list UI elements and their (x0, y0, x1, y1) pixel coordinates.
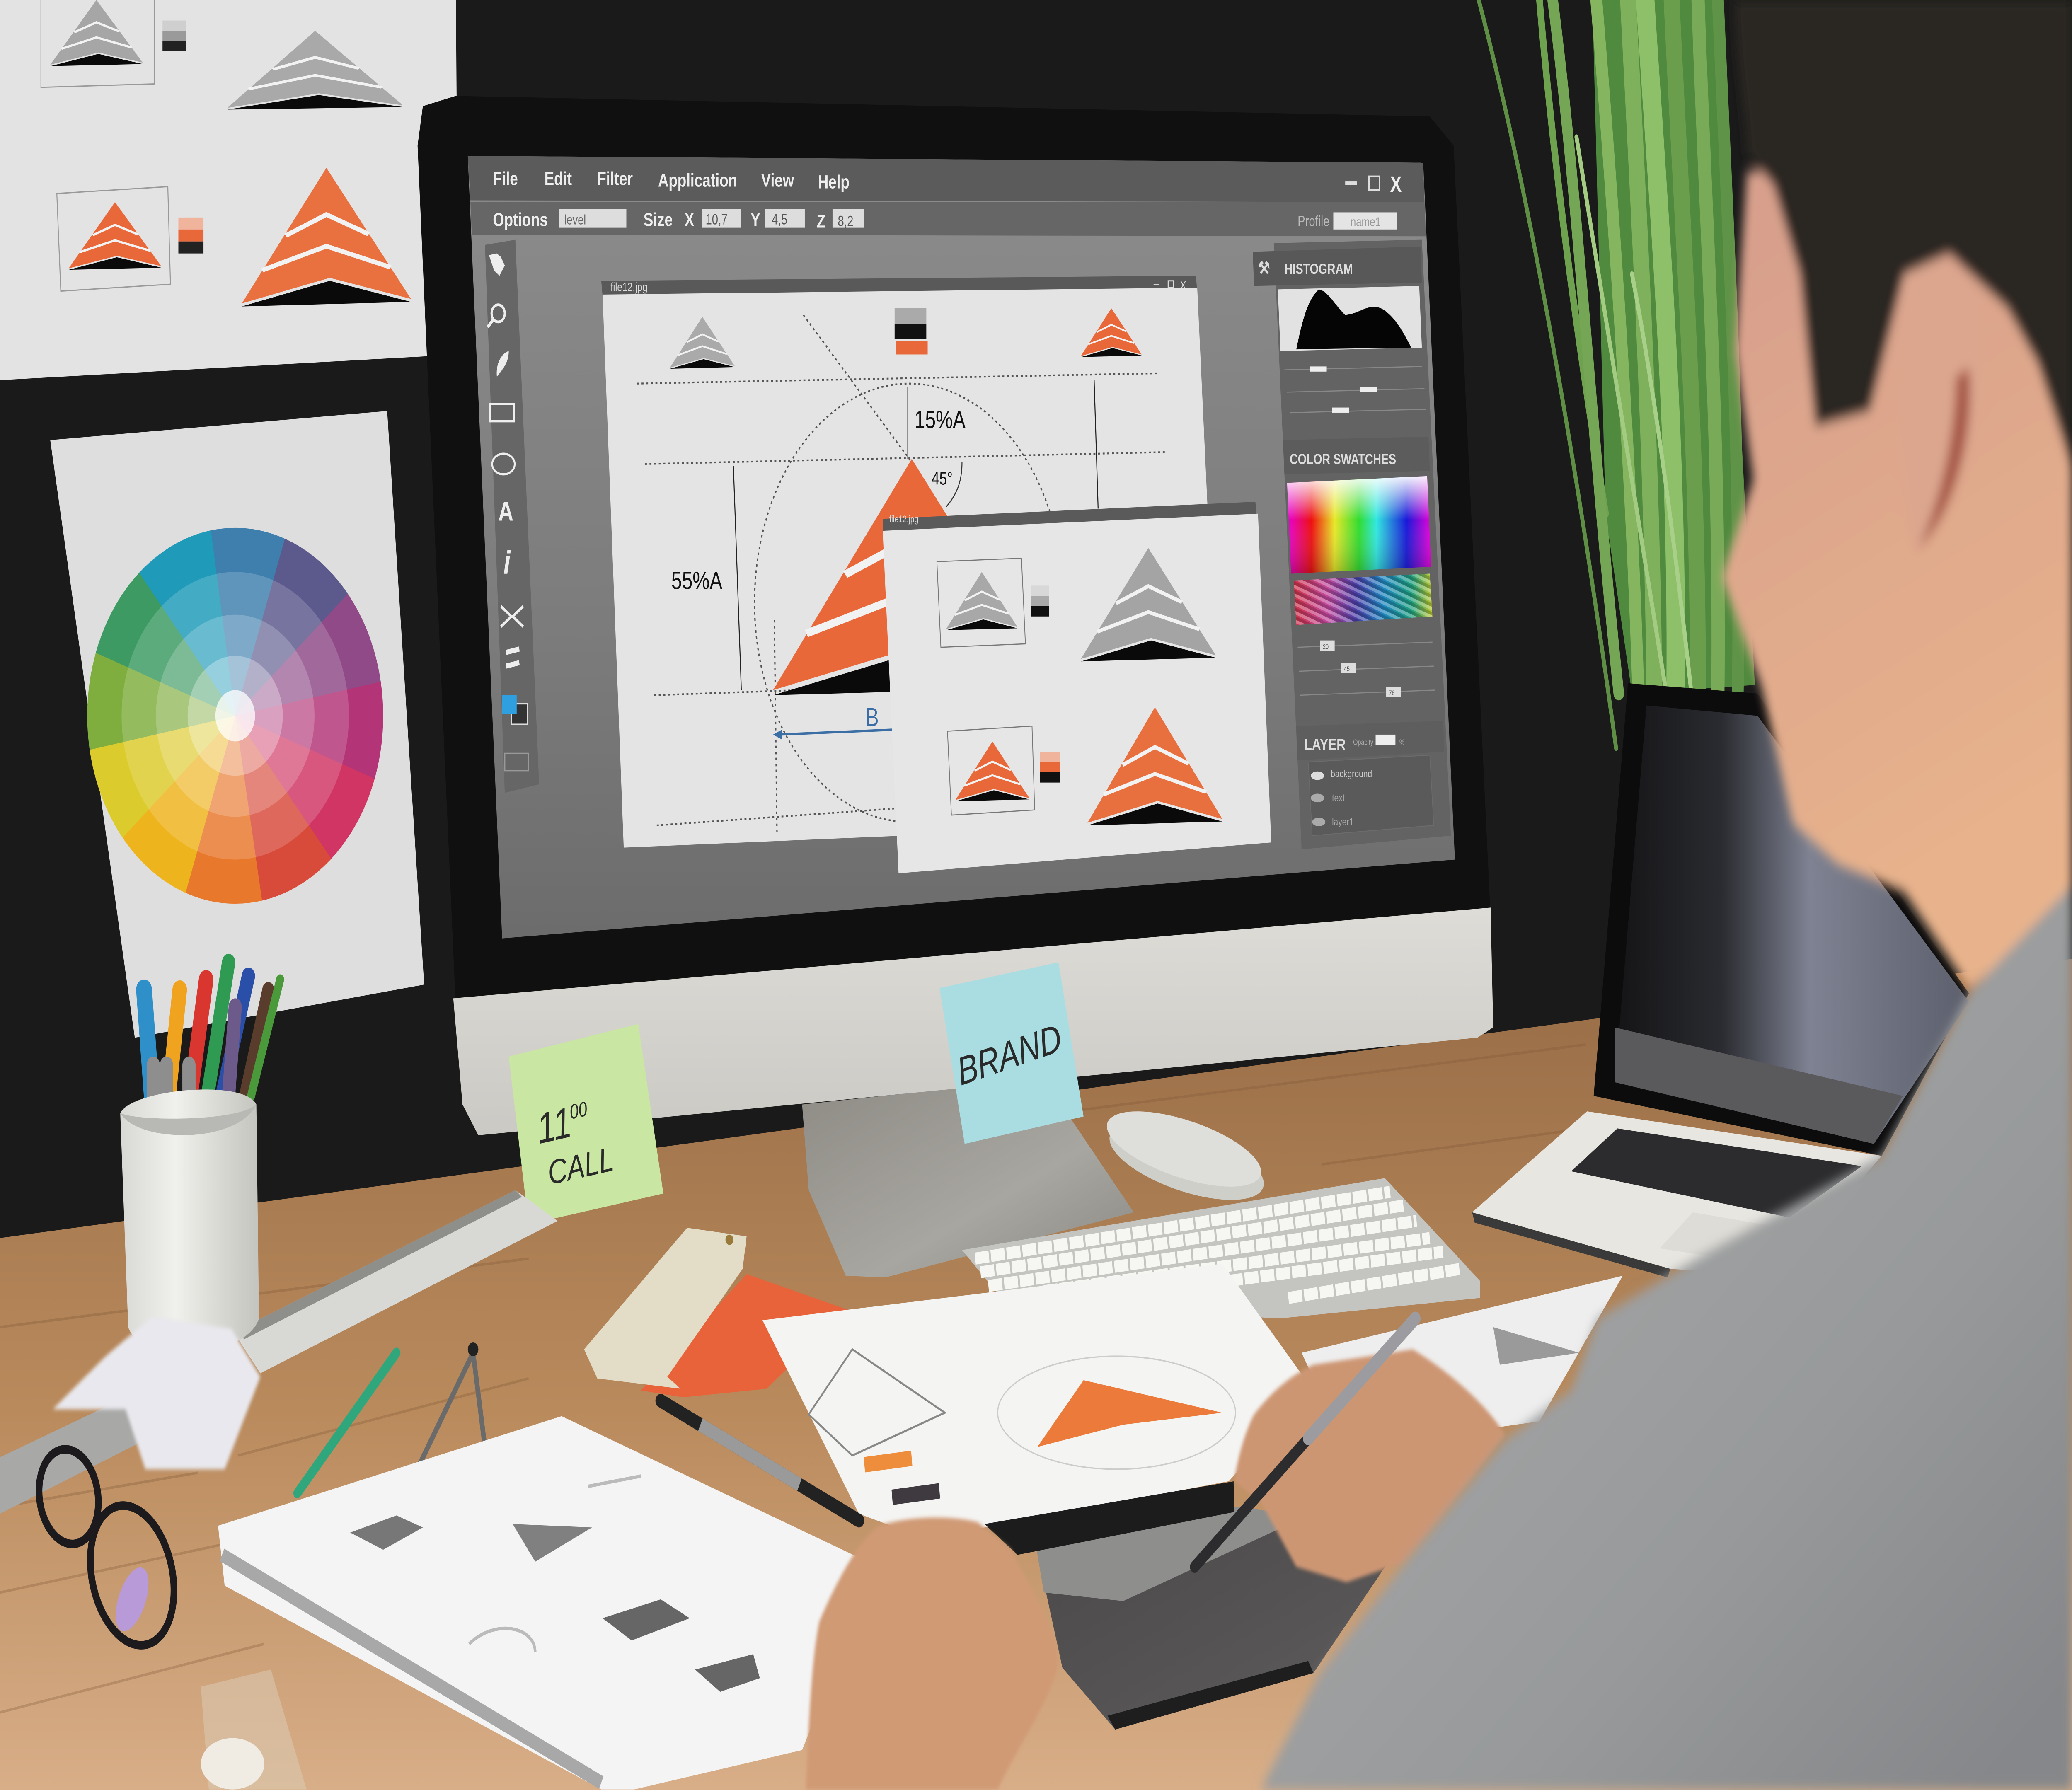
screen (468, 156, 1455, 939)
window: file12 main: 45° (932, 469, 953, 489)
sticky note: call: 00 (568, 1098, 589, 1124)
pens (144, 963, 280, 1116)
layer list: % (1399, 738, 1405, 747)
sticky note: call: CALL (545, 1139, 616, 1192)
graphics tablet (985, 1481, 1395, 1730)
monitor bezel (418, 96, 1491, 1010)
options bar: Y (750, 209, 760, 230)
layer list: text (1332, 792, 1345, 804)
options bar: 8,2 (838, 213, 853, 229)
transparent ruler (201, 1669, 307, 1790)
layer list: layer1 (1332, 816, 1353, 828)
window: file12 overlay (883, 502, 1271, 873)
marker pen (661, 1401, 859, 1521)
sticky note: call (509, 1024, 663, 1224)
right panel (1253, 240, 1451, 849)
window: file12 main: B (866, 703, 879, 732)
color swatches: 20 (1323, 643, 1329, 651)
man: right hand (1234, 1350, 1505, 1582)
menu bar: Application (658, 169, 737, 191)
tool palette: i (503, 544, 511, 581)
neck and face (1722, 171, 2072, 988)
options bar: Z (817, 210, 825, 232)
window: file12 main: X (1180, 279, 1186, 292)
options bar: name1 (1351, 215, 1381, 229)
second paper (1302, 1276, 1623, 1430)
plant (1479, 0, 1755, 748)
sketch paper (762, 1264, 1311, 1536)
keyboard (962, 1178, 1480, 1318)
sticky note: brand: BRAND (954, 1016, 1065, 1094)
window: file12 overlay: file12.jpg (889, 514, 918, 525)
tool palette (485, 240, 539, 793)
window: file12 main: 15%A (915, 406, 966, 434)
stylus (1195, 1318, 1415, 1567)
histogram: ⚒ (1258, 259, 1270, 278)
window: file12 main: – (1154, 278, 1159, 290)
options bar: 4,5 (772, 211, 787, 227)
window: file12 main: 55%A (671, 567, 723, 595)
menu bar (468, 156, 1424, 202)
notebook (218, 1416, 875, 1790)
monitor stand (802, 1079, 1134, 1277)
menu bar: Filter (597, 168, 633, 189)
layer list: Opacity (1353, 738, 1374, 747)
tool palette: A (498, 496, 513, 527)
poster: logo sheets (0, 0, 459, 380)
ear (1898, 261, 1983, 556)
mouse (1101, 1096, 1269, 1216)
menu bar: Help (818, 171, 850, 193)
layer list (1296, 721, 1444, 836)
sticky note: call: 11 (534, 1098, 574, 1153)
compass (419, 1342, 485, 1466)
options bar: Options (493, 209, 548, 230)
pen cup (120, 963, 280, 1352)
options bar: level (564, 212, 586, 227)
desk (0, 959, 2072, 1790)
glasses (31, 1441, 189, 1661)
histogram: HISTOGRAM (1284, 261, 1353, 277)
poster: colour wheel (50, 411, 424, 1038)
hair (1735, 0, 2072, 467)
options bar: X (685, 209, 694, 230)
monitor (418, 96, 1493, 1277)
sticky note: brand (939, 963, 1084, 1144)
laptop (1472, 683, 1969, 1277)
color swatches: 78 (1389, 689, 1395, 697)
color swatches: COLOR SWATCHES (1290, 451, 1396, 467)
window: file12 main (601, 276, 1222, 848)
ruler (0, 1190, 558, 1514)
layer list: background (1331, 768, 1372, 780)
menu bar: Edit (545, 168, 572, 189)
options bar: Size (644, 209, 673, 230)
monitor chin (453, 907, 1493, 1135)
color swatches (1283, 437, 1435, 697)
options bar (470, 202, 1426, 236)
menu bar: View (761, 169, 794, 191)
options bar: Profile (1297, 213, 1329, 229)
window: file12 main: file12.jpg (610, 281, 648, 294)
crumpled paper (53, 1317, 260, 1469)
man: left hand (806, 1517, 1058, 1790)
options bar: 10,7 (706, 211, 728, 227)
histogram (1253, 247, 1426, 413)
swatch book (584, 1228, 848, 1397)
sweater (1261, 885, 2072, 1790)
color swatches: 45 (1344, 666, 1350, 673)
green pencil (297, 1353, 397, 1493)
menu bar: X (1390, 172, 1402, 197)
man: head and sweater (1261, 0, 2072, 1790)
menu bar: File (493, 168, 518, 189)
layer list: LAYER (1304, 735, 1346, 754)
